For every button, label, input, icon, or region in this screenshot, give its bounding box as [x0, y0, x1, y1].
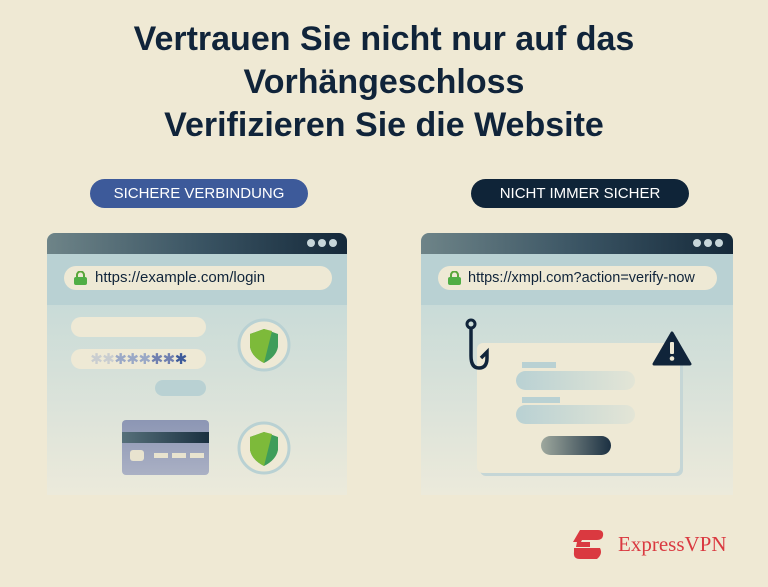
- panel: phishing browser: [421, 233, 733, 495]
- title: [134, 20, 634, 144]
- panel: safe browser: [47, 233, 347, 495]
- icon: shield 1: [238, 318, 290, 372]
- url bar: xmpl.com: https://xmpl.com?action=verify-now: [468, 270, 695, 286]
- url bar: example.com: [64, 266, 332, 290]
- credit card: [122, 420, 209, 475]
- logo: expressvpn: [573, 530, 726, 559]
- logo: expressvpn: ExpressVPN: [618, 532, 726, 556]
- title: Vertrauen Sie nicht nur auf das: [134, 20, 634, 58]
- icon: shield 2: [238, 422, 290, 474]
- login form: [71, 317, 206, 396]
- label: nicht immer sicher: [471, 179, 689, 208]
- url bar: xmpl.com: [438, 266, 717, 290]
- login form: ✱✱✱✱✱✱✱✱: [90, 350, 187, 368]
- label: sichere verbindung: SICHERE VERBINDUNG: [114, 185, 284, 202]
- label: sichere verbindung: [90, 179, 308, 208]
- fake dialog: [477, 343, 680, 473]
- label: nicht immer sicher: NICHT IMMER SICHER: [500, 185, 660, 202]
- url bar: example.com: https://example.com/login: [95, 269, 265, 286]
- title: Verifizieren Sie die Website: [164, 106, 604, 144]
- title: Vorhängeschloss: [244, 63, 524, 101]
- icon: fish hook: [466, 318, 489, 370]
- icon: warning: [652, 331, 692, 366]
